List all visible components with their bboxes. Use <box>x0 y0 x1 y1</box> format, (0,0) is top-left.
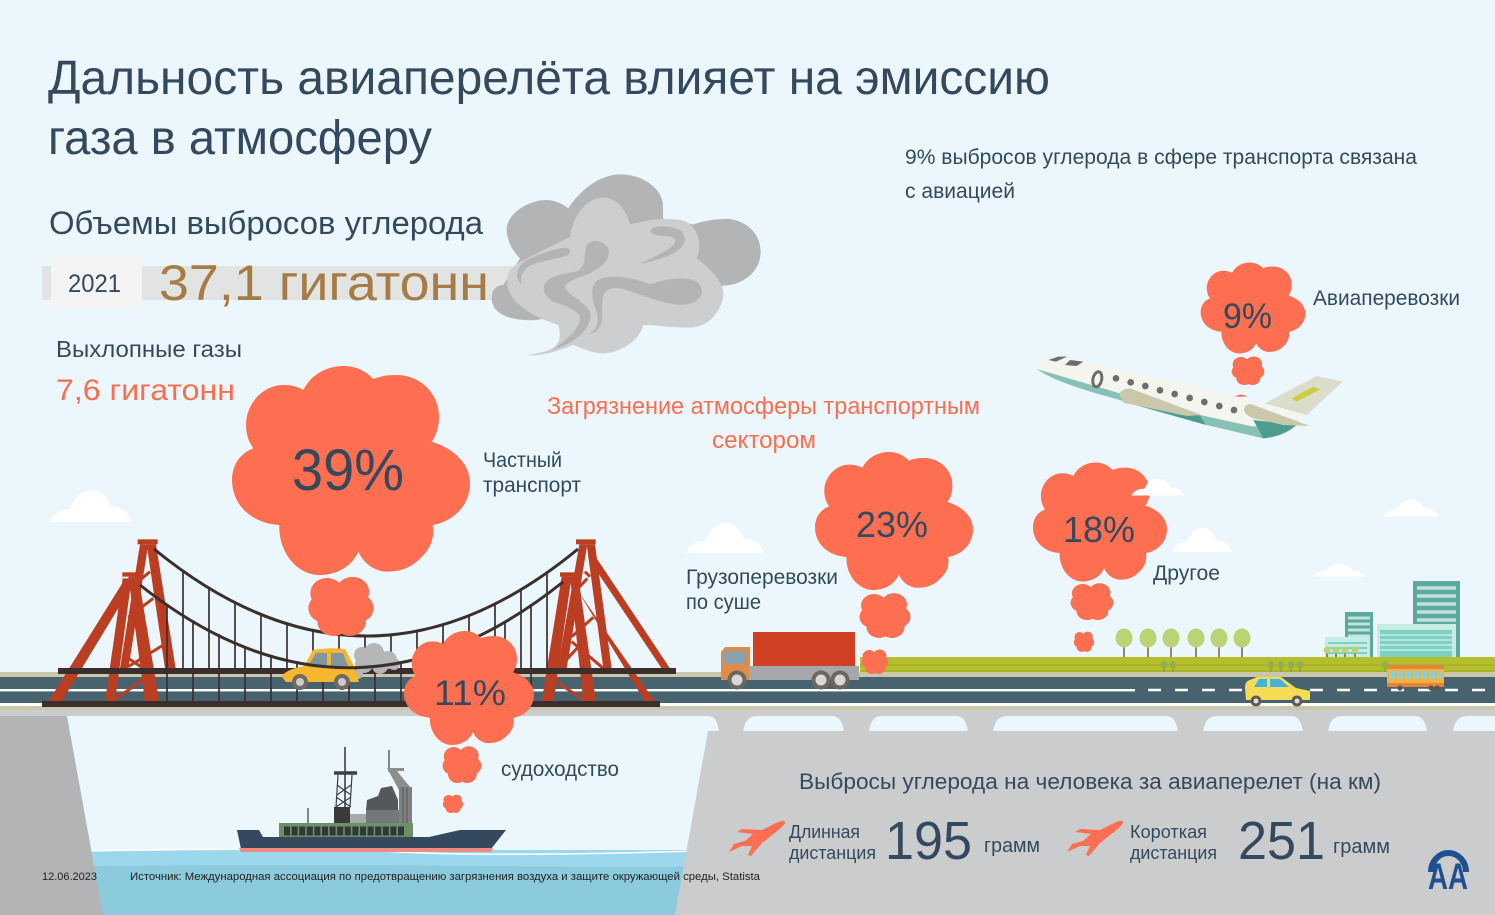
water <box>85 849 695 915</box>
green field <box>860 657 1495 674</box>
label: aviation: Авиаперевозки <box>1313 287 1460 310</box>
aviation note: с авиацией <box>905 180 1015 203</box>
icon: truck <box>721 632 859 690</box>
label: road freight: по суше <box>686 591 761 614</box>
exhaust gases: Выхлопные газы <box>56 336 242 362</box>
aviation note: 9% выбросов углерода в сфере транспорта связана <box>905 146 1417 169</box>
city buildings <box>1325 581 1460 657</box>
icon: bus <box>1387 665 1444 691</box>
date and source: 12.06.2023 <box>42 871 97 883</box>
long distance stat <box>789 811 1040 871</box>
cloud: 11% shipping: 11% <box>434 674 506 713</box>
exhaust gases: 7,6 гигатонн <box>56 374 235 407</box>
viaduct and ground <box>0 710 1495 732</box>
total emissions bar: 2021 <box>68 270 121 298</box>
subtitle: Объемы выбросов углерода <box>49 205 483 241</box>
short distance stat: 251 <box>1238 811 1325 871</box>
cloud: 9% aviation <box>1201 263 1305 353</box>
smoke puffs: shipping <box>443 746 481 813</box>
smoke puffs: other <box>1071 583 1113 652</box>
short distance stat <box>1130 811 1390 871</box>
label: road freight <box>686 566 838 614</box>
transport pollution heading: сектором <box>712 427 816 454</box>
long distance stat: грамм <box>984 835 1040 857</box>
ship <box>237 747 506 852</box>
bridge <box>42 539 676 707</box>
left tower <box>48 539 176 702</box>
label: road freight: Грузоперевозки <box>686 566 838 589</box>
total emissions bar <box>42 255 512 311</box>
icon: plane short distance <box>1067 821 1123 856</box>
long distance stat: 195 <box>885 811 972 871</box>
title <box>48 52 1050 165</box>
label: private transport: Частный <box>483 449 562 472</box>
transport pollution heading: Загрязнение атмосферы транспортным <box>547 393 980 420</box>
panel: per passenger emissions <box>729 769 1390 871</box>
label: private transport: транспорт <box>483 474 581 497</box>
label: private transport <box>483 449 581 497</box>
cloud: 23% freight: 23% <box>856 504 928 545</box>
icon: plane long distance <box>729 821 785 856</box>
icon: airplane <box>1037 357 1343 438</box>
cloud: 23% freight <box>815 452 973 590</box>
decorative clouds <box>50 490 1438 576</box>
cloud: 39% private transport <box>232 366 470 575</box>
title: Дальность авиаперелёта влияет на эмиссию <box>48 52 1050 105</box>
date and source: Источник: Международная ассоциация по предотвращению загрязнения воздуха и защите окружающей среды, Statista <box>130 871 761 883</box>
icon: grey smoke cloud <box>492 174 761 355</box>
title: газа в атмосферу <box>48 112 432 165</box>
short distance stat: Короткая <box>1130 822 1207 842</box>
icon: small yellow car <box>1245 677 1310 706</box>
exhaust gases <box>56 336 242 407</box>
logo: AA: AA <box>1428 856 1468 897</box>
aviation note <box>905 146 1417 203</box>
lower suspension cable <box>140 582 563 668</box>
cloud: 39% private transport: 39% <box>292 438 404 503</box>
cloud: 18% other <box>1033 462 1167 582</box>
icon: car smoke <box>353 643 400 679</box>
short distance stat: дистанция <box>1130 843 1217 863</box>
short distance stat: грамм <box>1333 836 1390 858</box>
panel: per passenger emissions: Выбросы углерода на человека за авиаперелет (на км) <box>799 769 1381 794</box>
cloud: 11% shipping <box>404 631 534 745</box>
smoke puff <box>308 577 374 636</box>
grey embankments <box>0 716 1495 915</box>
label: shipping: судоходство <box>501 758 619 781</box>
icon: yellow car <box>282 648 359 690</box>
cloud: 18% other: 18% <box>1063 509 1135 550</box>
cloud: 9% aviation: 9% <box>1223 297 1272 336</box>
road <box>0 672 1495 710</box>
label: other: Другое <box>1153 562 1220 585</box>
long distance stat: дистанция <box>789 843 876 863</box>
total emissions bar: 37,1 гигатонн <box>159 255 489 311</box>
long distance stat: Длинная <box>789 822 860 842</box>
trees <box>1116 628 1358 657</box>
decorative cloud over 18% <box>1132 478 1184 496</box>
right tower <box>542 539 670 702</box>
smoke puffs: freight <box>860 593 910 674</box>
smoke puff: aviation <box>1232 356 1264 385</box>
transport pollution heading <box>547 393 980 454</box>
